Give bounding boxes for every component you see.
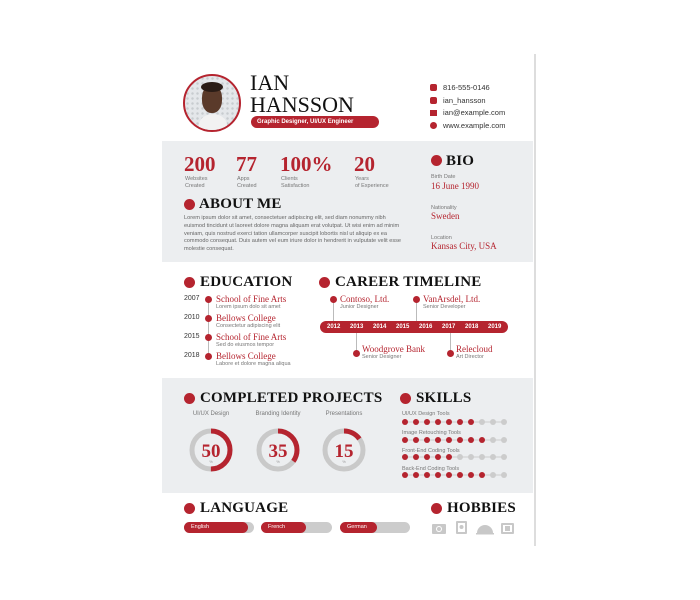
education: School of Fine Arts: [216, 294, 286, 304]
bio: Location: [431, 235, 452, 241]
name: [250, 70, 354, 117]
about me: [184, 196, 401, 252]
bio: Birth Date: [431, 174, 455, 180]
education: 2010: [184, 314, 200, 321]
education: School of Fine Arts: [216, 332, 286, 342]
completed projects: %: [209, 459, 213, 464]
career timeline: 2017: [442, 324, 455, 330]
contacts: [430, 83, 506, 130]
completed projects: 50: [202, 441, 220, 462]
language: French: [268, 524, 285, 530]
completed projects: COMPLETED PROJECTS: [200, 390, 382, 406]
education: 2007: [184, 295, 200, 302]
education: Consectetur adipiscing elit: [216, 323, 280, 329]
career timeline: CAREER TIMELINE: [335, 274, 482, 290]
stats: Websites: [185, 176, 208, 182]
career timeline: 2016: [419, 324, 432, 330]
language: English: [191, 524, 209, 530]
contacts: 816-555-0146: [443, 83, 490, 92]
career timeline: 2018: [465, 324, 478, 330]
stats: of Experience: [355, 182, 389, 188]
stats: Created: [185, 182, 205, 188]
photo: [183, 74, 241, 132]
education: Sed do eiusmos tempor: [216, 342, 274, 348]
stats: 100%: [280, 152, 332, 176]
name: IAN: [250, 70, 289, 95]
career timeline: Contoso, Ltd.: [340, 294, 389, 304]
language: German: [347, 524, 367, 530]
language: LANGUAGE: [200, 500, 288, 516]
education: Labore et dolore magna aliqua: [216, 361, 291, 367]
stats: 77: [236, 152, 257, 176]
education: 2018: [184, 352, 200, 359]
completed projects: %: [276, 459, 280, 464]
completed projects: 35: [268, 441, 288, 462]
education: Bellows College: [216, 313, 276, 323]
about me: ABOUT ME: [199, 196, 282, 212]
gray band top: [162, 141, 533, 262]
stats: Clients: [281, 176, 298, 182]
gray band projects: [162, 378, 533, 493]
career timeline: Woodgrove Bank: [362, 344, 425, 354]
completed projects: [184, 390, 382, 472]
bio: [431, 153, 497, 251]
education: 2015: [184, 333, 200, 340]
stats: Years: [355, 176, 369, 182]
stats: 20: [354, 152, 375, 176]
career timeline: Art Director: [456, 354, 484, 360]
skills: Front-End Coding Tools: [402, 448, 460, 454]
stats: [184, 152, 389, 188]
education: [184, 274, 292, 367]
career timeline: [319, 274, 508, 360]
hobbies: [431, 500, 516, 534]
about me: Lorem ipsum dolor sit amet, consectetuer adipiscing elit, sed diam nonummy nibh euismod tincidunt ut laoreet dolore magna aliquam erat volutpat. Ut wisi enim ad minim veniam, quis nostrud exerci tation ullamcorper suscipit lobortis nisl ut aliquip ex ea commodo consequat. Duis autem vel eum iriure dolor in hendrerit in vulputate velit esse molestie consequat.: [184, 215, 401, 252]
hobbies: HOBBIES: [447, 500, 516, 516]
education: EDUCATION: [200, 274, 292, 290]
career timeline: Relecloud: [456, 344, 492, 354]
stats: Created: [237, 182, 257, 188]
contacts: ian@example.com: [443, 108, 505, 117]
bio: BIO: [446, 153, 474, 169]
career timeline: Junior Designer: [340, 304, 379, 310]
career timeline: 2014: [373, 324, 386, 330]
completed projects: Branding Identity: [255, 411, 301, 417]
education: Lorem ipsum dolo sit amet: [216, 304, 280, 310]
education: Bellows College: [216, 351, 276, 361]
career timeline: 2015: [396, 324, 409, 330]
stats: 200: [184, 152, 216, 176]
skills: Back-End Coding Tools: [402, 466, 459, 472]
page edge line: [534, 54, 536, 546]
career timeline: 2013: [350, 324, 363, 330]
skills: Image Retouching Tools: [402, 430, 461, 436]
stats: Satisfaction: [281, 182, 309, 188]
career timeline: 2019: [488, 324, 501, 330]
skills: SKILLS: [416, 390, 471, 406]
career timeline: Senior Designer: [362, 354, 401, 360]
completed projects: %: [342, 459, 346, 464]
bio: Kansas City, USA: [431, 241, 497, 251]
stats: Apps: [237, 176, 250, 182]
subtitle pill: Graphic Designer, UI/UX Engineer: [257, 119, 353, 125]
completed projects: Presentations: [326, 411, 362, 417]
contacts: www.example.com: [443, 120, 506, 130]
language: [184, 500, 410, 533]
bio: 16 June 1990: [431, 181, 479, 191]
contacts: ian_hansson: [443, 96, 486, 104]
skills: [400, 390, 507, 478]
career timeline: 2012: [327, 324, 340, 330]
career timeline: Senior Developer: [423, 304, 466, 310]
bio: Sweden: [431, 211, 460, 221]
bio: Nationality: [431, 205, 457, 211]
completed projects: 15: [334, 441, 354, 462]
career timeline: VanArsdel, Ltd.: [423, 294, 480, 304]
name: HANSSON: [250, 92, 354, 117]
completed projects: UI/UX Design: [193, 411, 229, 417]
subtitle pill: [251, 116, 379, 128]
skills: UI/UX Design Tools: [402, 411, 450, 417]
